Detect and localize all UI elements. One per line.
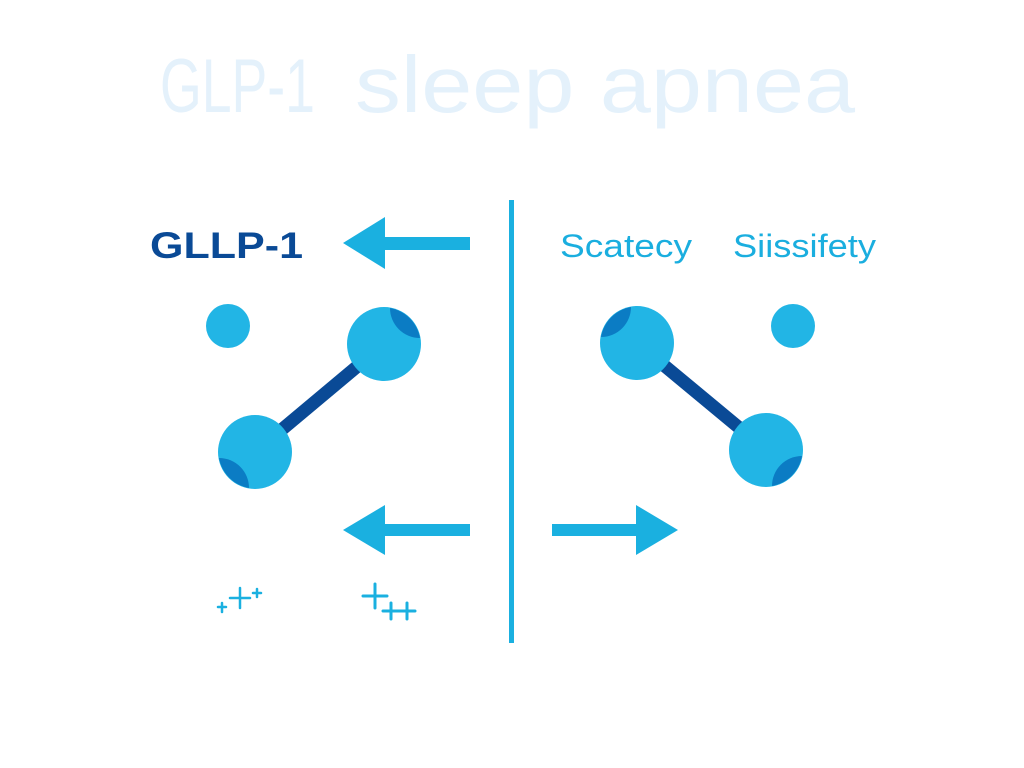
title	[160, 40, 856, 129]
divider	[509, 200, 514, 643]
title: GLP-1	[160, 44, 315, 129]
molecule: right	[600, 304, 815, 487]
molecule: left	[206, 304, 421, 489]
arrow: bottom left	[343, 505, 470, 555]
sparkles right	[363, 584, 415, 619]
sparkles left	[218, 588, 261, 612]
arrow: top left	[343, 217, 470, 269]
title: sleep apnea	[355, 40, 856, 129]
arrow: bottom right	[552, 505, 678, 555]
label: Scatecy: Scatecy	[560, 228, 692, 264]
heading: GLLP-1: GLLP-1	[150, 225, 303, 266]
label: Siissifety: Siissifety	[733, 228, 876, 264]
